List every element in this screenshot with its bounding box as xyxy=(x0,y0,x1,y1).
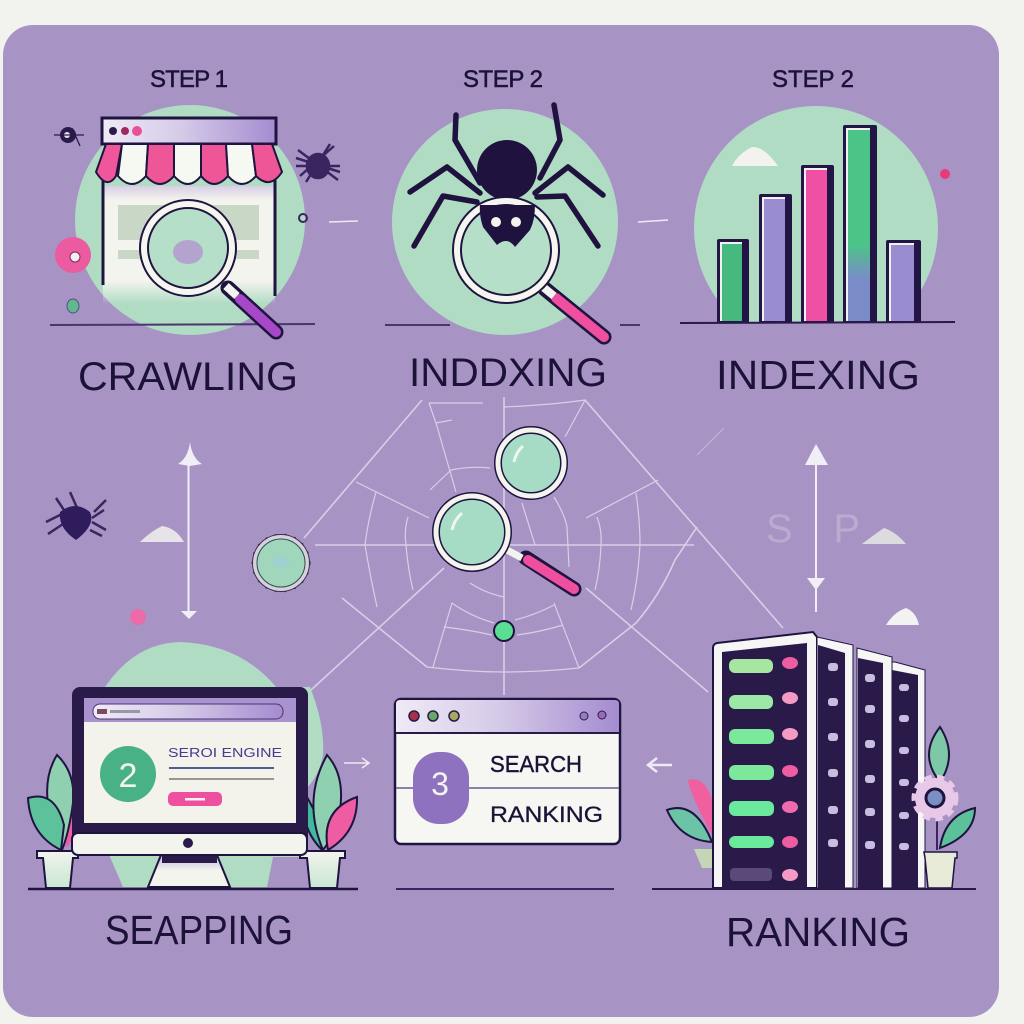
icon: cloud xyxy=(732,147,778,166)
label: indexing: INDEXING xyxy=(716,352,920,398)
icon: small bug left xyxy=(54,127,84,146)
icon: cloud left xyxy=(140,526,184,542)
heading: step 1: STEP 1 xyxy=(150,66,228,93)
heading: step 2: STEP 2 xyxy=(463,66,543,93)
icon: right plant and gear xyxy=(915,727,975,888)
panel: crawling step xyxy=(50,66,340,399)
step number badge xyxy=(413,752,469,824)
panel: searching step xyxy=(28,642,358,953)
label: crawling: CRAWLING xyxy=(78,355,298,399)
icon: gear dot xyxy=(299,214,307,222)
icon: magnifier xyxy=(144,204,276,332)
web diagram xyxy=(304,397,783,695)
icon: left plant xyxy=(28,755,78,888)
text: SEO letters: S P xyxy=(766,507,860,551)
arrow: right vertical xyxy=(805,444,828,612)
icon: monitor xyxy=(72,687,308,887)
text: search: SEARCH xyxy=(490,751,582,777)
arrow: left vertical xyxy=(178,442,202,619)
panel: chart step xyxy=(680,66,955,398)
icon: green dot xyxy=(67,299,79,313)
icon: storefront xyxy=(96,118,282,304)
green circle xyxy=(392,109,618,335)
icon: lens left xyxy=(252,534,310,592)
text: ranking: RANKING xyxy=(490,802,603,827)
arrow: left to window xyxy=(648,758,672,772)
heading: step 2: STEP 2 xyxy=(772,66,854,93)
text: search engine: SEROI ENGINE xyxy=(168,745,282,760)
step number badge xyxy=(100,746,156,802)
step number badge: 3 xyxy=(431,766,449,802)
icon: pink dot xyxy=(940,169,950,179)
icon: magnifier xyxy=(457,201,604,337)
panel: ranking step xyxy=(652,632,976,955)
green circle xyxy=(75,105,305,335)
icon: cloud lower right xyxy=(886,608,919,625)
icon: pink dot left xyxy=(130,609,146,625)
green circle xyxy=(694,106,938,322)
icon: right plant xyxy=(300,755,357,888)
panel: indexing spider step xyxy=(385,66,640,395)
bar chart xyxy=(717,125,921,323)
icon: large spider xyxy=(410,105,603,246)
icon: green dot xyxy=(494,621,514,641)
icon: server tower xyxy=(713,632,925,888)
icon: spider right xyxy=(296,144,340,182)
icon: spider left xyxy=(46,492,106,540)
icon: pink ring xyxy=(55,237,91,273)
green blob xyxy=(105,642,323,887)
icon: cloud right xyxy=(862,528,906,544)
label: indexing: INDDXING xyxy=(409,351,607,395)
panel: search ranking window xyxy=(395,699,620,889)
step number badge: 2 xyxy=(119,757,137,795)
arrow: right to window xyxy=(344,758,369,768)
label: searching: SEAPPING xyxy=(105,907,293,953)
icon: top magnifier xyxy=(498,430,564,496)
icon: left plant xyxy=(667,779,712,868)
label: ranking: RANKING xyxy=(726,909,910,955)
icon: centre magnifier xyxy=(436,496,574,589)
